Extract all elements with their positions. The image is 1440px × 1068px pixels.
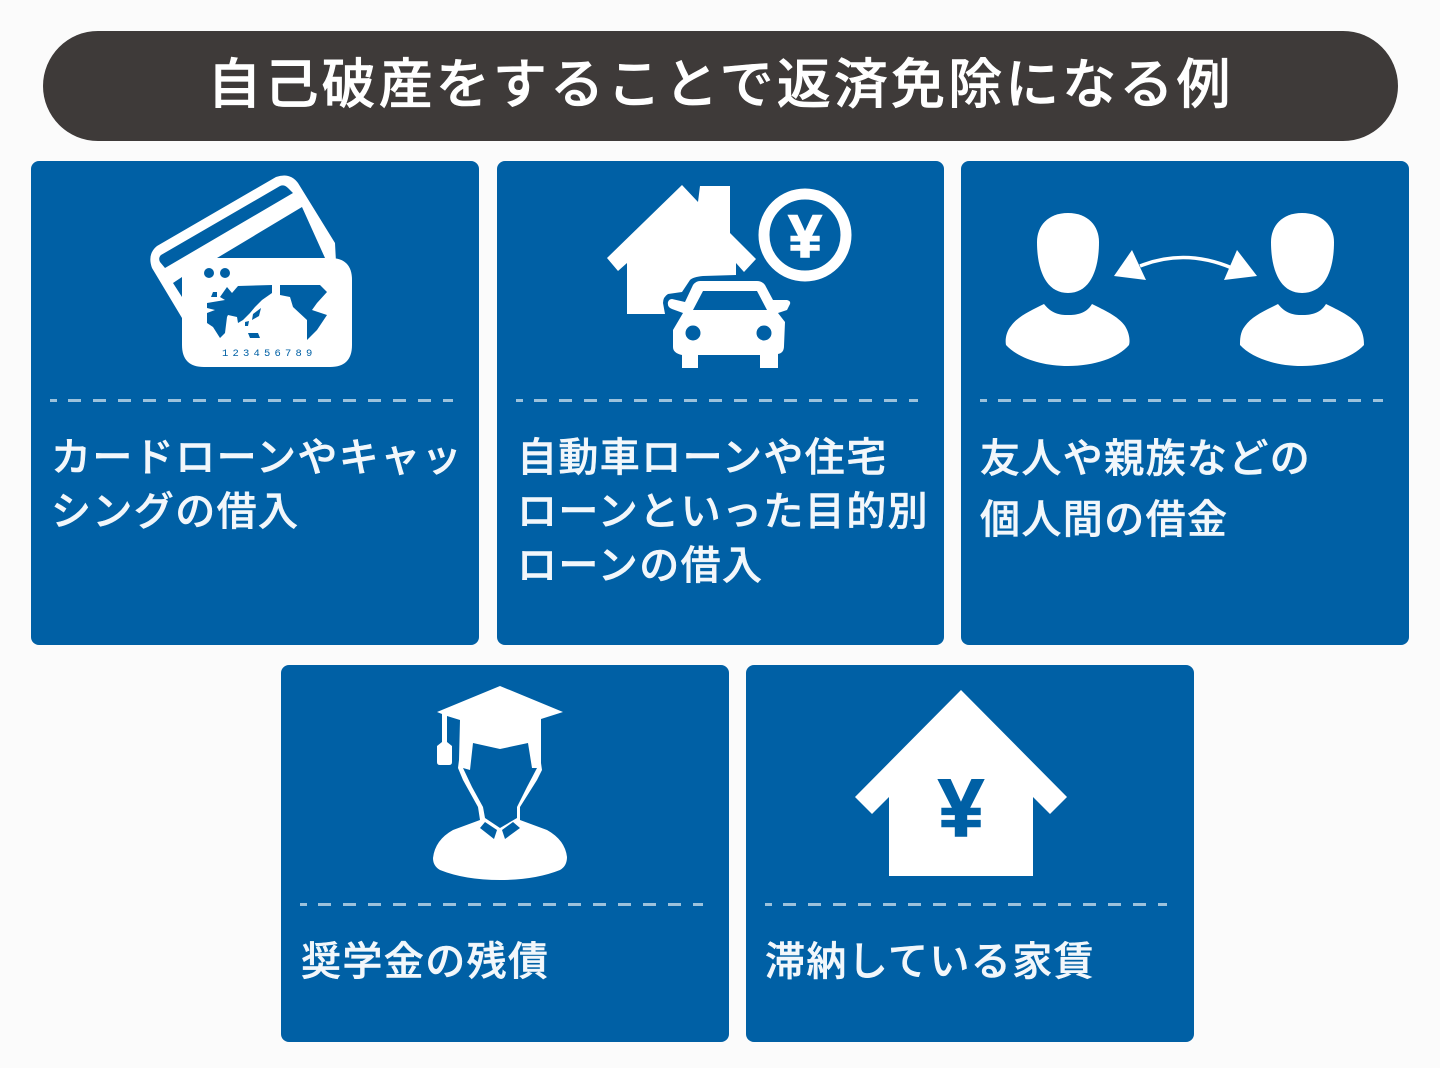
text: student loan label: 奨学金の残債 bbox=[301, 940, 549, 984]
panel: student loan bbox=[281, 665, 729, 1042]
icon: house with yen bbox=[855, 690, 1067, 876]
text: purpose loan label: 自動車ローンや住宅 bbox=[517, 436, 888, 480]
panel: unpaid rent bbox=[746, 665, 1194, 1042]
text: purpose loan label: ローンの借入 bbox=[517, 544, 763, 588]
text: personal debt label: 個人間の借金 bbox=[980, 498, 1228, 542]
icon: graduate bbox=[433, 686, 567, 880]
panel: purpose loan bbox=[497, 161, 944, 645]
text: card loan label: カードローンやキャッ bbox=[51, 436, 463, 480]
panel: card loan bbox=[31, 161, 479, 645]
yen sign: ¥ bbox=[938, 763, 984, 854]
title: 自己破産をすることで返済免除になる例 bbox=[207, 55, 1234, 115]
text: card loan label bbox=[51, 436, 463, 534]
text: purpose loan label: ローンといった目的別 bbox=[517, 490, 929, 534]
panel: personal debt bbox=[961, 161, 1409, 645]
icon: credit cards bbox=[150, 176, 352, 367]
text: personal debt label bbox=[980, 437, 1311, 542]
card number: 123456789 bbox=[222, 348, 317, 360]
title bbox=[43, 31, 1398, 141]
text: purpose loan label bbox=[517, 436, 929, 588]
icon: house, car and yen bbox=[607, 185, 852, 368]
icon: two people with arrow bbox=[1006, 213, 1364, 366]
text: personal debt label: 友人や親族などの bbox=[980, 437, 1311, 481]
yen sign: ¥ bbox=[788, 203, 822, 270]
text: unpaid rent label: 滞納している家賃 bbox=[765, 940, 1095, 984]
text: card loan label: シングの借入 bbox=[51, 490, 299, 534]
